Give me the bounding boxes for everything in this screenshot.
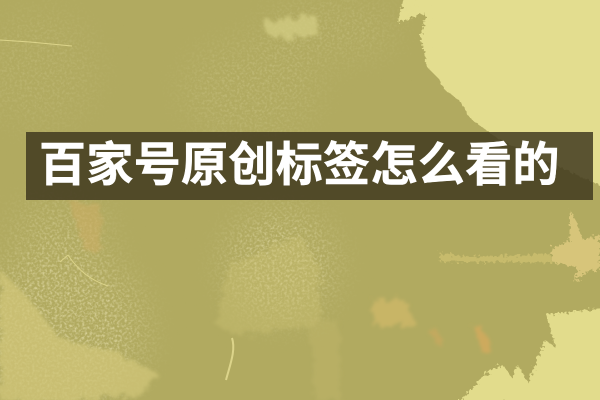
upper canopy gap <box>262 15 318 38</box>
lake sky reflection <box>459 308 600 400</box>
title banner <box>26 132 593 200</box>
fallen branch <box>0 40 108 286</box>
foliage speckle <box>0 0 393 400</box>
sky <box>398 0 600 190</box>
far shore, right <box>440 210 600 283</box>
rocks lower left <box>0 202 490 400</box>
title text: 百家号原创标签怎么看的 <box>39 138 560 191</box>
dead tree trunk <box>226 338 233 380</box>
